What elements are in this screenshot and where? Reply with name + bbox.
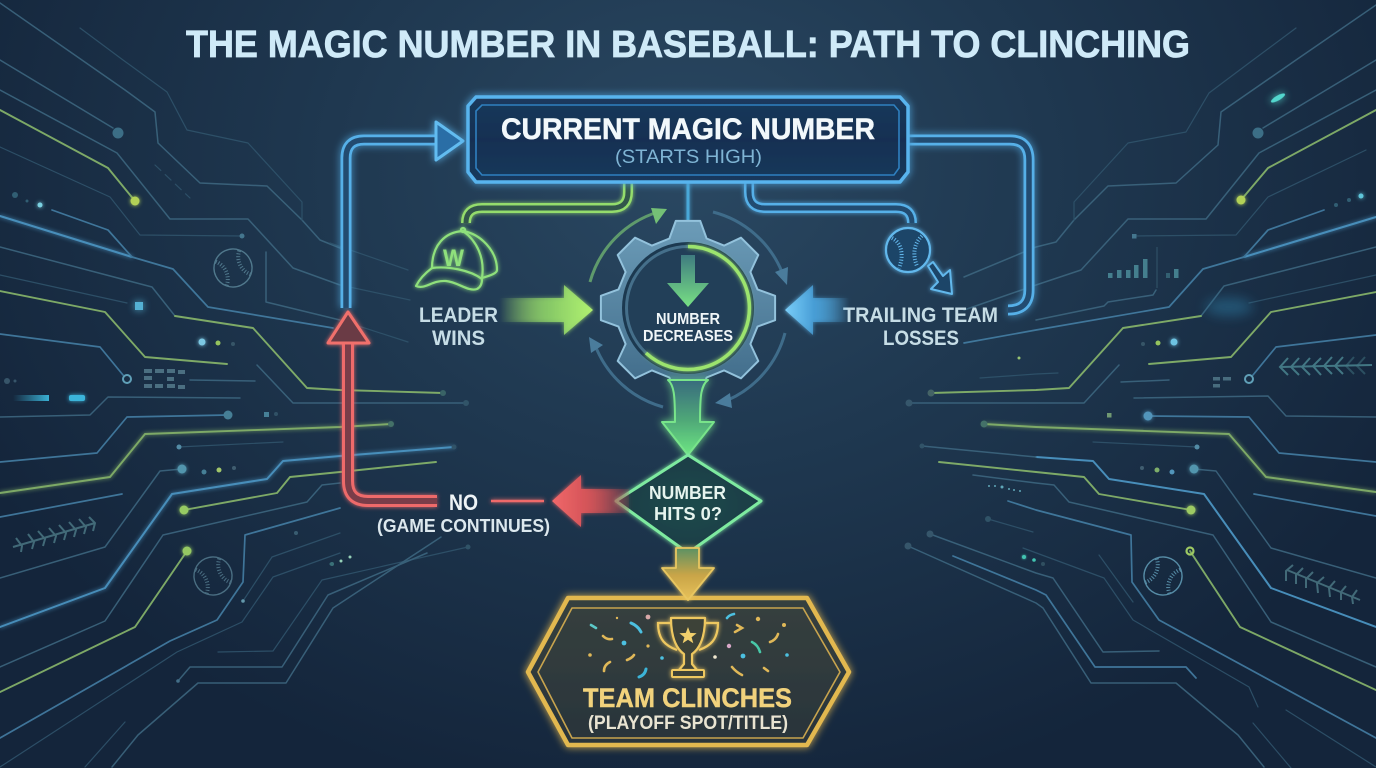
- text: no game continues: (GAME CONTINUES): [377, 516, 550, 536]
- decision: number hits 0: NUMBER: [649, 483, 726, 503]
- arrow: loop pipe up to current magic number: [346, 122, 463, 308]
- text: trailing team losses: TRAILING TEAM: [843, 304, 998, 327]
- arrow: cycle green upper left: [590, 208, 667, 282]
- text: number decreases: NUMBER: [656, 311, 720, 328]
- icon: baseball cap: [416, 228, 497, 290]
- decision: number hits 0: HITS 0?: [654, 504, 722, 524]
- decoration: background baseball upper left: [208, 243, 258, 293]
- arrow: cycle upper right: [713, 212, 788, 285]
- decoration: stitch chevrons lower right: [1286, 565, 1360, 604]
- arrow: red loop back: [328, 312, 437, 501]
- text: leader wins: WINS: [432, 327, 485, 350]
- text: starts high: (STARTS HIGH): [615, 147, 762, 168]
- text: no game continues: NO: [449, 490, 478, 515]
- connector: red dash: [491, 500, 544, 502]
- text: number decreases: [643, 311, 733, 345]
- text: trailing team losses: LOSSES: [883, 327, 959, 350]
- text: playoff spot or title: (PLAYOFF SPOT/TITLE): [588, 713, 788, 734]
- circuit traces: left side: [0, 3, 470, 767]
- decoration: stitch chevrons upper right: [1280, 357, 1372, 375]
- connector: blue branch to trailing team losses: [749, 182, 912, 223]
- decision: number hits 0: [616, 455, 761, 553]
- icon: baseball cap: W: [443, 245, 464, 272]
- arrow: cycle lower right: [715, 333, 785, 408]
- arrow: red no arrow: [552, 475, 629, 527]
- arrow: leader wins into gear: [500, 285, 593, 335]
- icon: gear number decreases: [601, 221, 775, 395]
- title: THE MAGIC NUMBER IN BASEBALL: PATH TO CLINCHING: [186, 24, 1190, 66]
- heading: current magic number: CURRENT MAGIC NUMBER: [501, 113, 875, 146]
- panel: team clinches: [528, 598, 849, 745]
- arrow: right feedback pipe: [909, 140, 1029, 310]
- circuit traces: right side: [904, 5, 1376, 768]
- icon: trophy: [658, 618, 718, 677]
- text: no game continues: [377, 490, 550, 536]
- text: number decreases: DECREASES: [643, 328, 733, 345]
- heading: team clinches: TEAM CLINCHES: [583, 683, 792, 713]
- decoration: background baseball lower left: [188, 551, 238, 601]
- decoration: background baseball lower right: [1138, 551, 1188, 601]
- text: leader wins: LEADER: [419, 304, 498, 327]
- connector: magic number to gear: [686, 182, 690, 222]
- confetti: [591, 614, 778, 677]
- text: leader wins: [419, 304, 498, 350]
- arrow: trailing team losses into gear: [785, 285, 849, 335]
- panel: current magic number: [468, 97, 908, 182]
- decoration: stitch chevrons left: [13, 517, 95, 552]
- icon: inner down arrow: [667, 255, 709, 307]
- arrow: gold down to clinch: [662, 548, 714, 600]
- icon: baseball with down arrow: [886, 228, 952, 294]
- connector: green branch to leader wins: [466, 182, 628, 223]
- arrow: cycle lower left: [589, 337, 663, 407]
- text: trailing team losses: [843, 304, 998, 350]
- arrow: number decreases down to decision: [662, 380, 714, 455]
